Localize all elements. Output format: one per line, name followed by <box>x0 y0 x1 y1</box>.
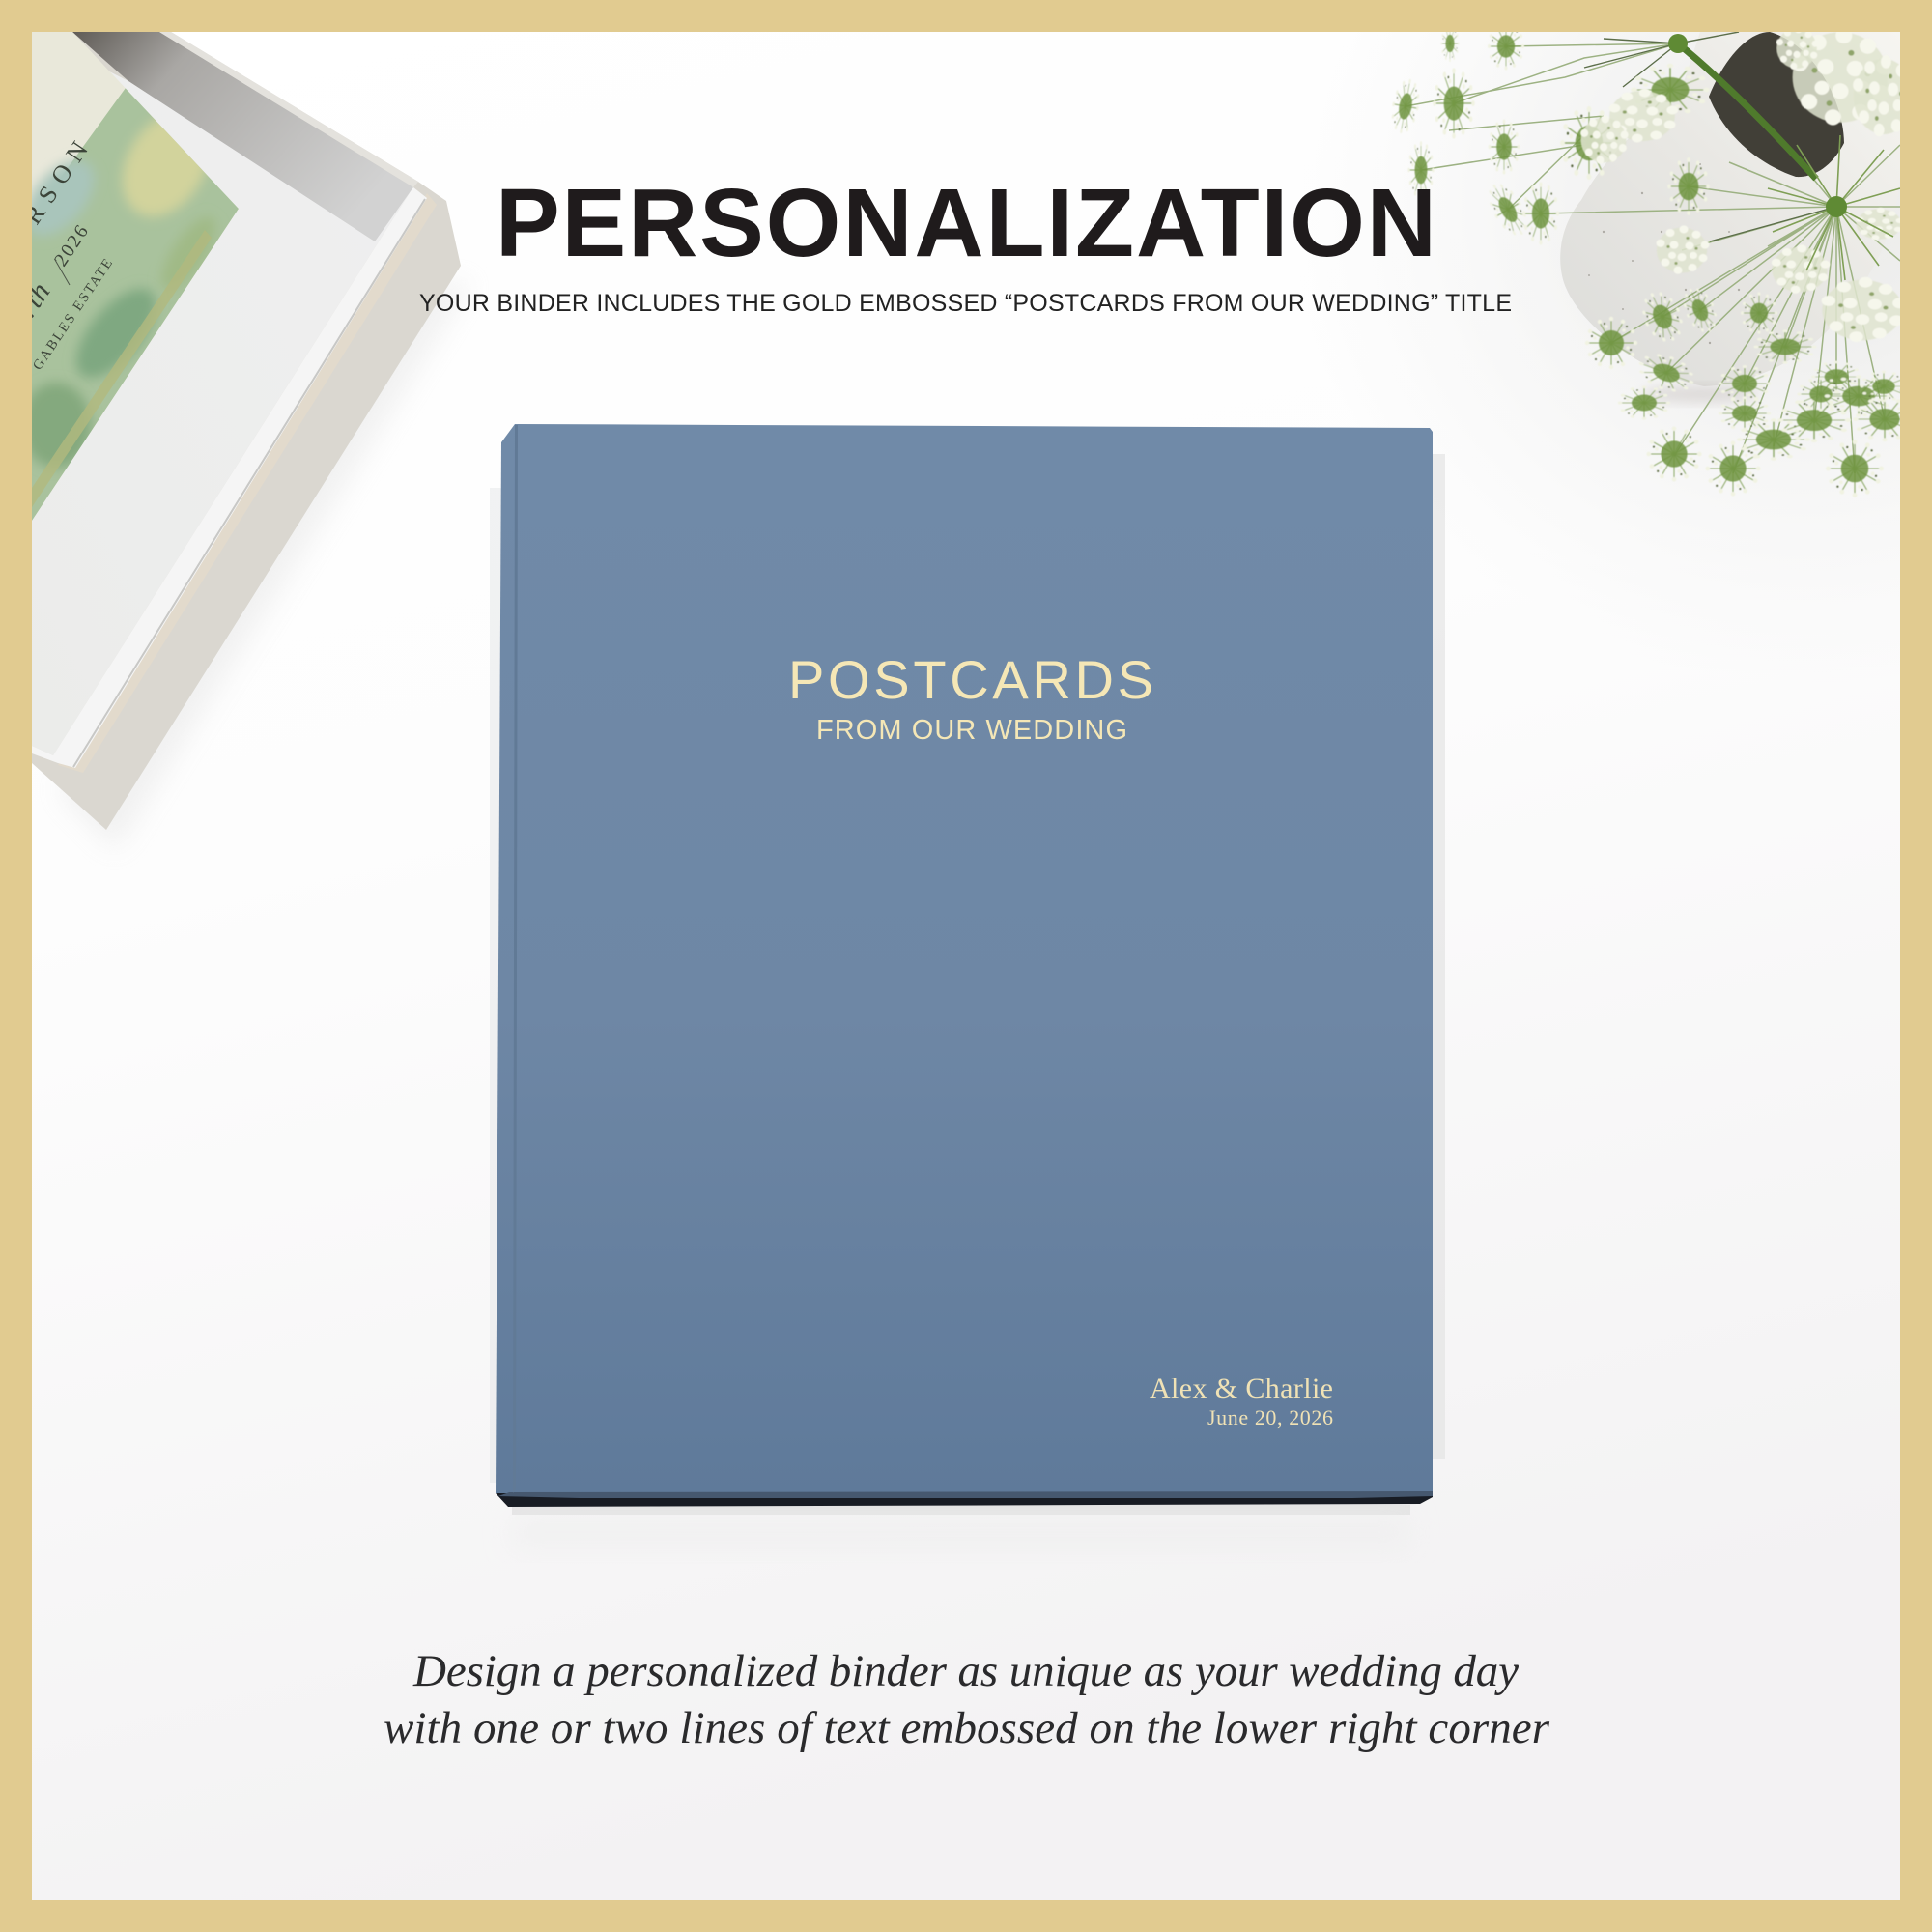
box white inner rim <box>32 187 427 768</box>
postcard printed text: rth <box>11 276 56 323</box>
binder dark bottom edge <box>496 1492 1433 1507</box>
binder spine hinge <box>513 425 518 1493</box>
vase body <box>1560 32 1833 386</box>
vase dark mouth <box>1709 32 1844 177</box>
flower heads: side and top views <box>1388 23 1917 497</box>
postcard with watercolor landscape <box>32 32 239 521</box>
flower stems <box>1406 43 1900 473</box>
binder soft shadows <box>490 454 1445 1549</box>
box floor <box>32 32 411 755</box>
embossed cover title <box>792 661 1151 740</box>
postcard printed text: GABLES ESTATE <box>30 255 117 373</box>
title: PERSONALIZATION <box>496 169 1436 277</box>
vase speckles <box>1588 163 1740 344</box>
postcard printed text: RSON <box>18 129 99 229</box>
bottom caption <box>384 1646 1550 1753</box>
postcard printed text <box>32 140 112 369</box>
embossed personalization text <box>1150 1378 1333 1428</box>
binder cover <box>496 424 1433 1493</box>
embossed personalization text: June 20, 2026 <box>1208 1406 1333 1430</box>
bottom caption: with one or two lines of text embossed on the lower right corner <box>384 1703 1550 1753</box>
embossed cover title: POSTCARDS <box>788 649 1153 710</box>
box inner fabric seam <box>58 193 437 773</box>
blue binder <box>496 424 1433 1507</box>
big star flower <box>1668 34 1900 280</box>
photo: ceramic vase with queen anne's lace <box>1388 23 1917 497</box>
box outer wall <box>32 32 461 830</box>
box top rim <box>159 32 418 187</box>
bottom caption: Design a personalized binder as unique as your wedding day <box>412 1646 1519 1696</box>
subtitle: YOUR BINDER INCLUDES THE GOLD EMBOSSED “POSTCARDS FROM OUR WEDDING” TITLE <box>419 290 1512 317</box>
embossed personalization text: Alex & Charlie <box>1150 1373 1333 1405</box>
postcard printed text: 2026 <box>50 220 94 270</box>
photo: open keepsake box lid <box>11 32 473 850</box>
embossed cover title: FROM OUR WEDDING <box>816 715 1127 746</box>
box inner shadowed wall <box>72 32 390 222</box>
